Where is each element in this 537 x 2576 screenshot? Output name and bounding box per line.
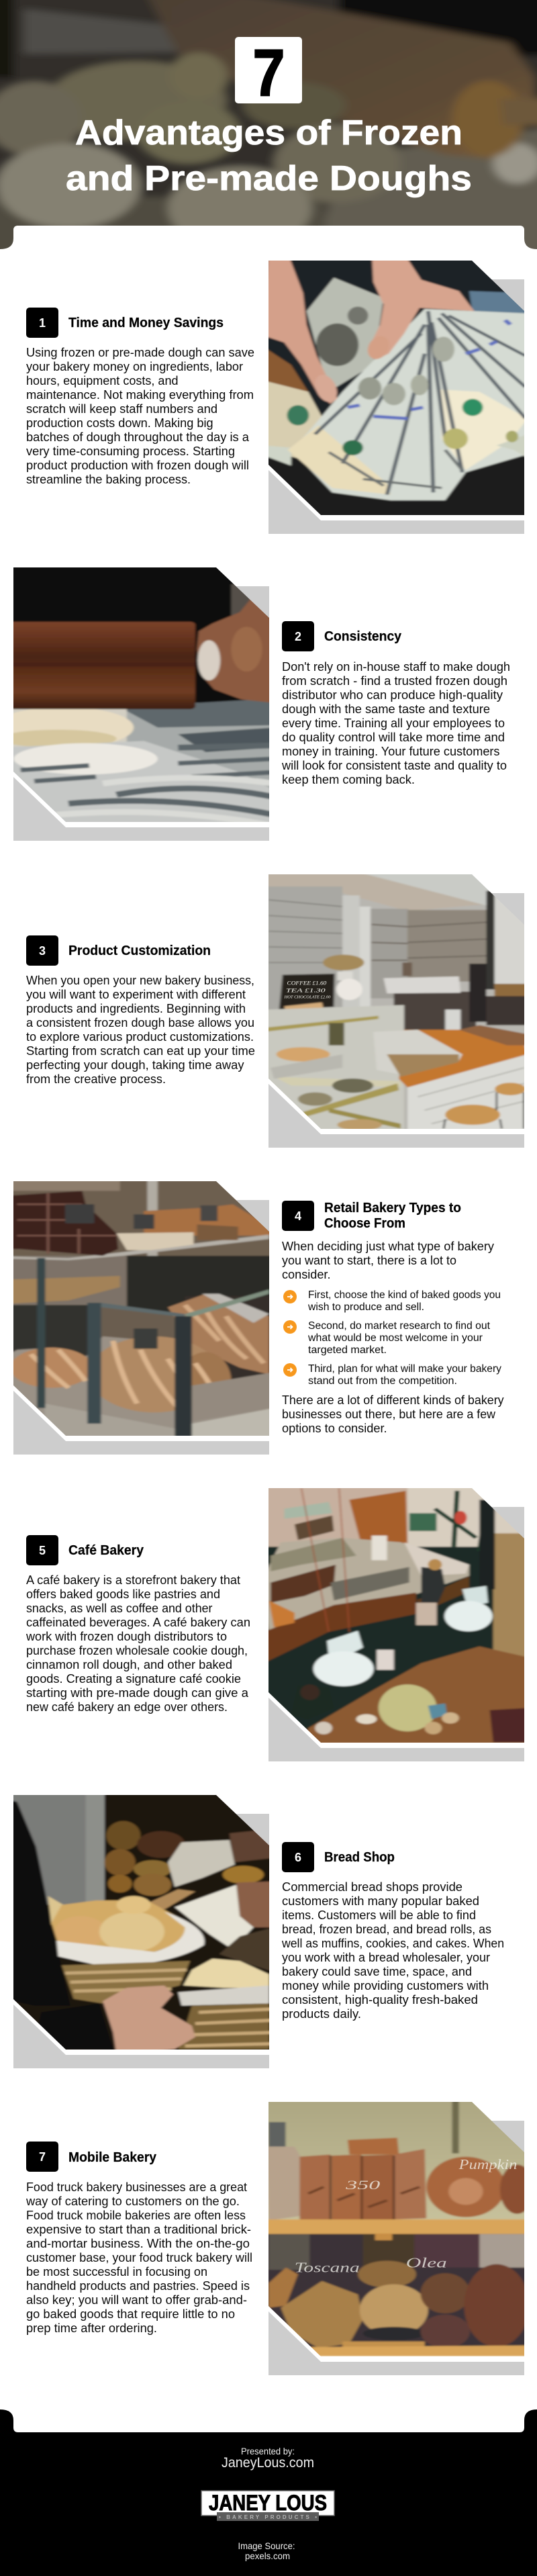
body text: section 2: every time. Training all your employees to [282, 717, 505, 730]
body text: section 7 [26, 2180, 252, 2335]
body text: section 6: Commercial bread shops provide [282, 1880, 462, 1894]
icon: orange arrow 3 [283, 1363, 297, 1377]
heading: time and money savings: Time and Money Savings [68, 316, 224, 330]
section 2: consistency [0, 551, 510, 841]
body text: section 7: Food truck bakery businesses are a great [26, 2180, 247, 2194]
bullet: third [283, 1363, 501, 1387]
heading: cafe bakery: Café Bakery [68, 1543, 144, 1558]
body text: section 1: very time-consuming process. Starting [26, 445, 235, 458]
body text: section 7: go baked goods that require little to no [26, 2307, 235, 2321]
number badge 6: 6 [295, 1851, 301, 1864]
photo frame: cafe interior [268, 1488, 524, 1761]
heading: bread shop: Bread Shop [324, 1850, 395, 1865]
body text: section 5: goods. Creating a signature café cookie [26, 1672, 241, 1686]
number badge 7: 7 [39, 2150, 46, 2164]
body text: section 2: money in training. Your future customers [282, 745, 499, 758]
bullet: third: Third, plan for what will make your bakery [308, 1363, 501, 1375]
bullet: third: stand out from the competition. [308, 1375, 457, 1387]
icon: orange arrow 1 [283, 1290, 297, 1303]
body text: section 5: A café bakery is a storefront bakery that [26, 1573, 240, 1587]
body text: section 6: bread, frozen bread, and bread rolls, as [282, 1923, 491, 1936]
photo frame: bread shelves: Olea [406, 2254, 447, 2270]
body text: section 6: well as muffins, cookies, and cakes. When [281, 1937, 504, 1950]
photo frame: money [268, 261, 524, 534]
body text: section 3 [26, 974, 255, 1086]
intro text: section 4: you want to start, there is a lot to [282, 1254, 456, 1267]
photo frame: bakery counter: HOT CHOCOLATE £2.00 [284, 994, 331, 999]
section 7: mobile bakery [26, 2082, 537, 2375]
body text: section 1: hours, equipment costs, and [26, 374, 179, 387]
body text: section 7: also key; you will want to offer grab-and- [26, 2293, 247, 2307]
photo frame: bakery counter [268, 874, 524, 1148]
photo frame: bakery counter: COFFEE £1.60 [287, 980, 327, 986]
body text: section 3: products and ingredients. Beginning with [26, 1002, 246, 1015]
body text: section 6: customers with many popular baked [282, 1894, 479, 1908]
body text: section 3: When you open your new bakery business, [26, 974, 254, 987]
body text: section 7: expensive to start than a traditional brick- [26, 2223, 251, 2236]
bullet: first: wish to produce and sell. [307, 1301, 424, 1313]
image source [238, 2540, 295, 2561]
section 3: product customization [26, 853, 537, 1148]
body text: section 3: to explore various product customizations. [26, 1030, 254, 1044]
section 6: bread shop [0, 1780, 504, 2070]
icon: orange arrow 2 [283, 1320, 297, 1334]
photo frame: bread shelves: Pumpkin [458, 2156, 517, 2172]
title: Advantages of Frozen [75, 113, 462, 152]
title [66, 113, 472, 198]
number badge 5 [26, 1535, 58, 1565]
presented by: Presented by: [241, 2446, 295, 2456]
body text: section 5: offers baked goods like pastries and [26, 1588, 220, 1601]
body text: section 1: scratch will keep staff numbers and [26, 402, 217, 416]
number badge 3 [26, 935, 58, 966]
body text: section 5: caffeinated beverages. A café bakery can [26, 1616, 250, 1629]
body text: section 5: cinnamon roll dough, and other baked [26, 1658, 232, 1671]
body text: section 1: product production with frozen dough will [26, 459, 249, 472]
bullet: second: Second, do market research to find out [308, 1320, 491, 1332]
hero banner with dough photo [0, 0, 537, 249]
number badge 3: 3 [39, 944, 46, 958]
closing text: section 4: options to consider. [282, 1422, 387, 1435]
body text: section 1: streamline the baking process. [26, 473, 191, 486]
body text: section 5: purchase frozen wholesale cookie dough, [26, 1644, 248, 1657]
body text: section 5: work with frozen dough distributors to [26, 1630, 227, 1643]
photo frame: bread shelves: Toscana [295, 2259, 360, 2275]
bullet: second: targeted market. [308, 1344, 387, 1356]
body text: section 7: be most successful in focusing on [26, 2265, 207, 2279]
title badge with number 7: 7 [252, 36, 285, 109]
body text: section 5 [26, 1573, 250, 1714]
body text: section 5: new café bakery an edge over others. [26, 1700, 228, 1714]
body text: section 5: snacks, as well as coffee and other [26, 1602, 213, 1615]
photo frame: bread baskets [13, 1795, 269, 2068]
photo frame: bakery counter: TEA £1.30 [286, 988, 326, 994]
body text: section 2: do quality control will take more time and [282, 731, 505, 744]
body text: section 6: items. Customers will be able to find [282, 1908, 476, 1922]
body text: section 1: your bakery money on ingredients, labor [26, 360, 243, 373]
number badge 1 [26, 308, 58, 338]
body text: section 3: you will want to experiment with different [26, 988, 246, 1001]
body text: section 3: Starting from scratch can eat up your time [26, 1044, 255, 1058]
presented by [222, 2446, 314, 2471]
body text: section 5: starting with pre-made dough can give a [26, 1686, 249, 1700]
footer [0, 2409, 537, 2576]
body text: section 2: dough with the same taste and texture [282, 702, 490, 716]
presented by: JaneyLous.com [222, 2455, 314, 2471]
bullet: first [283, 1289, 501, 1313]
body text: section 6: consistent, high-quality fresh-baked [282, 1993, 478, 2007]
body text: section 2: keep them coming back. [282, 773, 415, 786]
body text: section 7: handheld products and pastries. Speed is [26, 2279, 250, 2293]
body text: section 1: production costs down. Making big [26, 416, 213, 430]
photo frame: pastry display case [13, 1181, 269, 1455]
number badge 4: 4 [295, 1209, 301, 1223]
body text: section 7: prep time after ordering. [26, 2321, 157, 2335]
body text: section 2: Don't rely on in-house staff to make dough [282, 660, 510, 674]
number badge 2: 2 [295, 630, 301, 643]
section 5: cafe bakery [26, 1471, 537, 1761]
body text: section 7: Food truck mobile bakeries are often less [26, 2209, 246, 2222]
body text: section 1: batches of dough throughout the day is a [26, 430, 250, 444]
photo frame: bread shelves: 350 [345, 2178, 381, 2193]
body text: section 6: bakery could save time, space, and [282, 1965, 472, 1978]
body text: section 7: way of catering to customers on the go. [26, 2195, 240, 2208]
number badge 4 [282, 1201, 314, 1231]
photo frame: rolling pin [13, 567, 269, 841]
heading: retail bakery types: Retail Bakery Types to [324, 1201, 461, 1215]
white content panel [13, 226, 524, 249]
number badge 2 [282, 621, 314, 651]
body text: section 3: perfecting your dough, taking time away [26, 1058, 244, 1072]
body text: section 2: distributor who can produce high-quality [282, 688, 503, 702]
closing text: section 4 [282, 1393, 504, 1435]
section 1: time and money savings [26, 248, 537, 534]
body text: section 3: from the creative process. [26, 1072, 166, 1086]
bullet: second: what would be most welcome in your [307, 1332, 483, 1344]
number badge 7 [26, 2142, 58, 2172]
body text: section 1: Using frozen or pre-made dough can save [26, 346, 254, 359]
image source: pexels.com [245, 2550, 290, 2561]
number badge 6 [282, 1842, 314, 1872]
bullet: second [283, 1320, 491, 1356]
body text: section 6 [281, 1880, 504, 2021]
body text: section 7: and-mortar business. With the on-the-go [26, 2237, 250, 2250]
number badge 1: 1 [39, 316, 46, 330]
body text: section 3: a consistent frozen dough base allows you [26, 1016, 254, 1029]
body text: section 6: products daily. [282, 2007, 361, 2021]
body text: section 2: will look for consistent taste and quality to [281, 759, 507, 772]
title badge with number 7 [235, 36, 302, 109]
body text: section 6: money while providing customers with [282, 1979, 489, 1992]
heading: mobile bakery: Mobile Bakery [68, 2150, 157, 2165]
intro text: section 4: consider. [282, 1268, 330, 1281]
title: and Pre-made Doughs [66, 159, 472, 198]
closing text: section 4: There are a lot of different kinds of bakery [282, 1393, 504, 1407]
body text: section 6: you work with a bread wholesaler, your [282, 1951, 490, 1964]
intro text: section 4 [282, 1240, 494, 1281]
heading: consistency: Consistency [324, 629, 402, 644]
bullet: first: First, choose the kind of baked goods you [308, 1289, 501, 1301]
section 4: retail bakery types [0, 1162, 504, 1455]
heading: retail bakery types [324, 1201, 461, 1231]
body text: section 1 [26, 346, 254, 486]
logo: Janey Lous Bakery Products: JANEY LOUS [209, 2491, 327, 2515]
heading: product customization: Product Customization [68, 944, 211, 958]
body text: section 2 [281, 660, 510, 786]
logo: Janey Lous Bakery Products: • BAKERY PRODUCTS • [219, 2514, 317, 2520]
closing text: section 4: businesses out there, but here are a few [282, 1408, 496, 1421]
intro text: section 4: When deciding just what type of bakery [282, 1240, 494, 1253]
number badge 5: 5 [39, 1544, 46, 1557]
body text: section 2: from scratch - find a trusted frozen dough [282, 674, 507, 688]
photo frame: bread shelves [268, 2102, 524, 2375]
body text: section 1: maintenance. Not making everything from [26, 388, 254, 402]
heading: retail bakery types: Choose From [324, 1216, 405, 1231]
image source: Image Source: [238, 2540, 295, 2551]
body text: section 7: customer base, your food truck bakery will [26, 2251, 252, 2264]
